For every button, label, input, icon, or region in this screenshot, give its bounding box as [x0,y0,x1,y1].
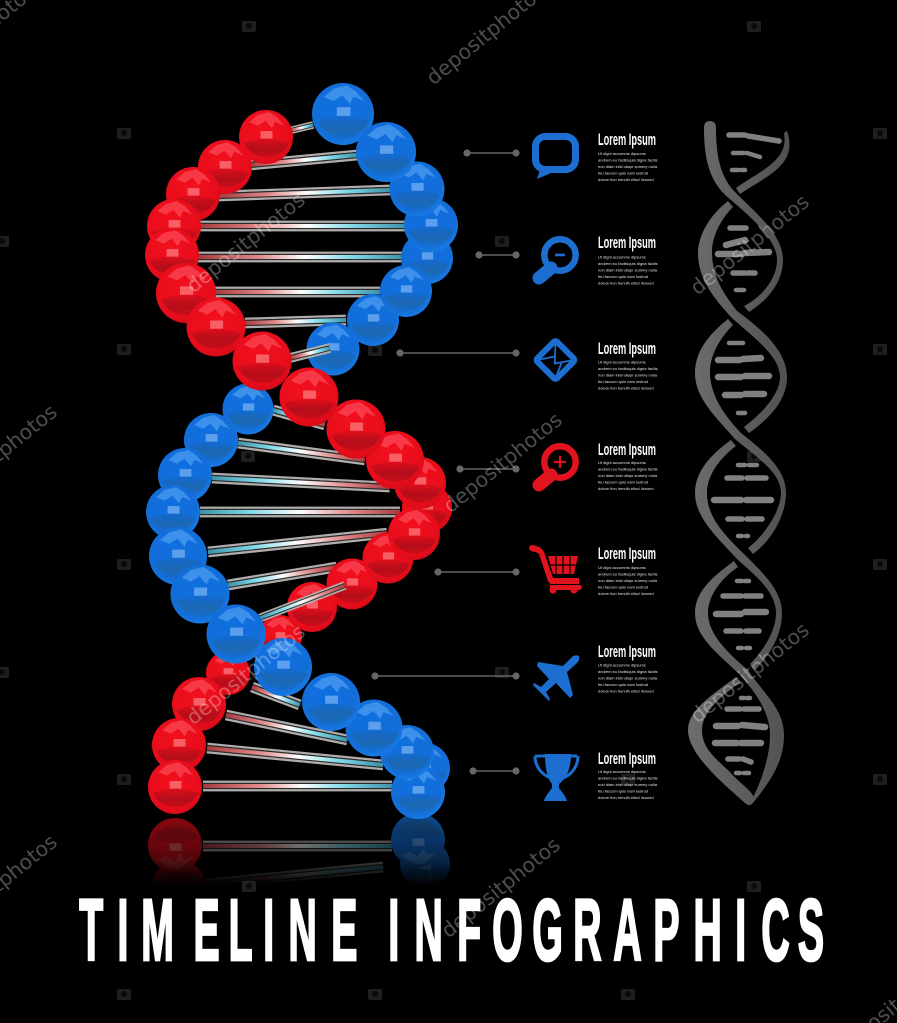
watermarks: depositphotos [686,189,814,300]
text block 4 [598,441,658,491]
text block 2: feu faccum quis nam iustrud [598,274,648,279]
text block 6: dolore tion hendih eliscl iisnoed [598,688,654,694]
text block 1: andrem eu facilisquis digna facilis [598,158,658,162]
watermarks: depositphotos [437,832,565,943]
text block 5: dolore tion hendih eliscl iisnoed [598,591,654,596]
text block 4: andrem eu facilisquis digna facilis [598,466,658,472]
text block 3: Lorem Ipsum [598,340,656,358]
text block 2: non diam inisl ullapr summy nulla [598,268,658,272]
text block 3: Ut digni accumms dipsums [598,360,646,364]
text block 1: Lorem Ipsum [598,131,656,149]
text block 6: non diam inisl ullapr summy nulla [598,676,658,680]
text block 7: Lorem Ipsum [598,750,656,768]
text block 5 [598,545,658,596]
grey DNA strands [688,121,789,805]
text block 2: Ut digni accumms dipsums [598,254,646,260]
text block 3: feu faccum quis nam iustrud [598,379,648,384]
text block 1: Ut digni accumms dipsums [598,151,646,156]
text block 5: andrem eu facilisquis digna facilis [598,572,658,576]
text block 6 [598,643,658,694]
text block 5: Ut digni accumms dipsums [598,565,646,570]
text block 2 [598,234,658,286]
icon: zoom out magnifier [539,239,576,278]
icon: speech bubble [536,136,576,179]
upper helix section [145,83,458,426]
text block 5: feu faccum quis nam iustrud [598,584,648,590]
text block 1: feu faccum quis nam iustrud [598,170,648,176]
lower helix section [148,651,450,819]
text block 7: feu faccum quis nam iustrud [598,788,648,794]
watermarks: depositphotos [182,619,310,730]
icon: trophy [535,754,578,801]
text block 1 [598,131,658,182]
text block 2: andrem eu facilisquis digna facilis [598,261,658,266]
title: TIMELINEINFOGRAPHICS [79,883,824,979]
text block 5: Lorem Ipsum [598,545,656,563]
text block 6: Lorem Ipsum [598,643,656,661]
3D DNA helix of red and blue spheres [145,83,458,914]
text block 7: dolore tion hendih eliscl iisnoed [598,795,654,800]
text block 4: non diam inisl ullapr summy nulla [598,473,658,478]
text block 4: Ut digni accumms dipsums [598,460,646,465]
text block 3 [598,340,658,390]
text block 7: andrem eu facilisquis digna facilis [598,776,658,780]
text block 3: andrem eu facilisquis digna facilis [598,366,658,371]
icon: zoom in magnifier [539,446,576,485]
grey DNA strand illustration [688,121,789,805]
connector lines [371,149,520,775]
text block 6: Ut digni accumms dipsums [598,662,646,668]
text block 5: non diam inisl ullapr summy nulla [598,578,658,583]
watermarks: depositphotos [182,187,310,298]
text block 1: non diam inisl ullapr summy nulla [598,164,658,169]
text block 6: andrem eu facilisquis digna facilis [598,669,658,674]
text block 7: non diam inisl ullapr summy nulla [598,782,658,787]
middle helix section [146,384,452,696]
text block 4: dolore tion hendih eliscl iisnoed [598,486,654,491]
icon: airplane [533,655,579,701]
icon: envelope [536,340,575,380]
grey DNA rungs [714,135,779,773]
text block 7: Ut digni accumms dipsums [598,769,646,774]
text block 3: dolore tion hendih eliscl iisnoed [598,386,654,390]
reflection of helix base [148,816,450,882]
text block 6: feu faccum quis nam iustrud [598,682,648,687]
text block 1: dolore tion hendih eliscl iisnoed [598,177,654,182]
text block 4: feu faccum quis nam iustrud [598,480,648,484]
watermarks: depositphotos [439,407,567,518]
watermarks: depositphotos [686,617,814,728]
icon: shopping cart [529,545,582,594]
text block 7 [598,750,658,800]
text block 2: Lorem Ipsum [598,234,656,252]
text block 4: Lorem Ipsum [598,441,656,459]
text block 3: non diam inisl ullapr summy nulla [598,372,658,378]
text block 2: dolore tion hendih eliscl iisnoed [598,280,654,286]
